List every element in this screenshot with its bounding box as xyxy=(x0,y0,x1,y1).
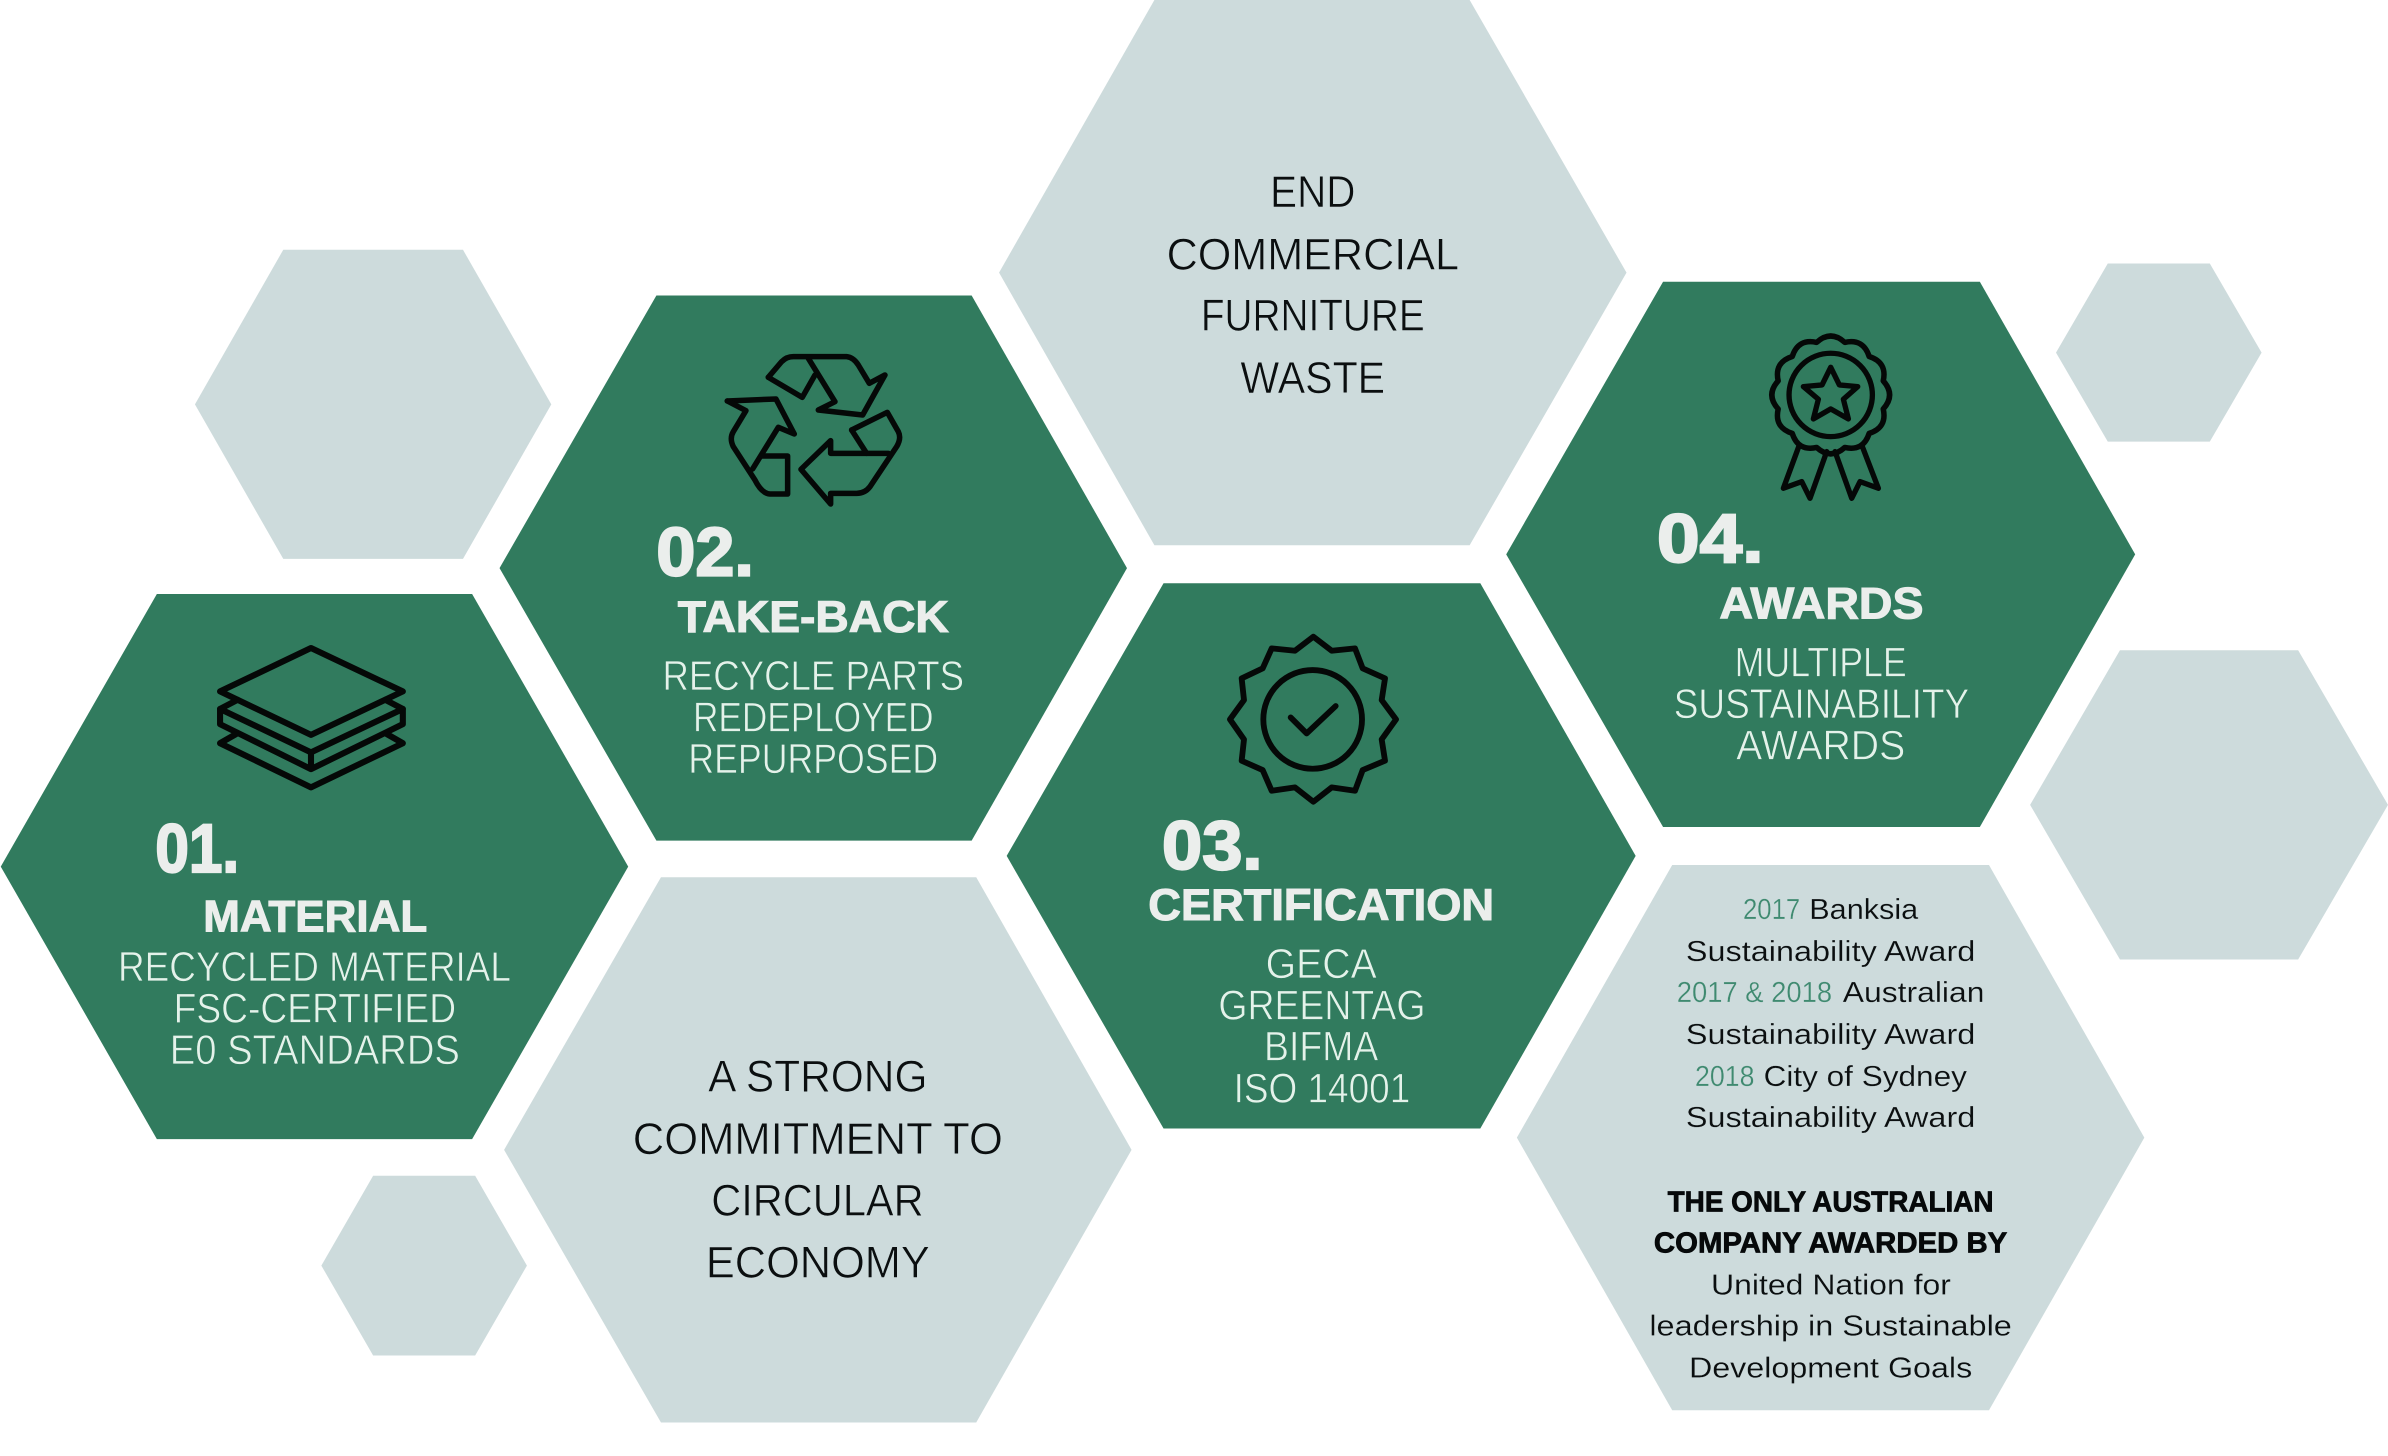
statement text: WASTE xyxy=(1240,354,1385,403)
icon: stacked layers xyxy=(220,648,403,787)
statement text: CIRCULAR xyxy=(711,1176,924,1225)
heading: certification: CERTIFICATION xyxy=(1148,881,1494,930)
decorative hexagon: upper right small xyxy=(2056,263,2262,442)
list of awards: Sustainability Award xyxy=(1686,1019,1975,1051)
list: material items: RECYCLED MATERIAL xyxy=(118,943,511,990)
number 01: 01. xyxy=(155,810,239,887)
statement text: ECONOMY xyxy=(706,1238,930,1287)
list of awards: Australian xyxy=(1843,977,1984,1009)
panel: 01 material xyxy=(1,594,628,1139)
heading: material: MATERIAL xyxy=(203,892,427,941)
United Nations description xyxy=(1649,1270,2012,1385)
decorative hexagon: upper left xyxy=(195,250,551,559)
number 02: 02. xyxy=(656,514,754,591)
United Nations description: leadership in Sustainable xyxy=(1649,1311,2012,1343)
list: certifications: BIFMA xyxy=(1264,1023,1378,1070)
list: take-back items: RECYCLE PARTS xyxy=(662,652,964,699)
list of awards: 2017 & 2018 xyxy=(1677,977,1832,1009)
hexagon background 02 xyxy=(500,295,1127,841)
statement text: A STRONG xyxy=(708,1053,927,1102)
hexagon background 03 xyxy=(1007,583,1636,1129)
bold statement: COMPANY AWARDED BY xyxy=(1654,1228,2007,1260)
list of awards: City of Sydney xyxy=(1764,1061,1967,1093)
panel: strong commitment xyxy=(504,877,1132,1422)
icon: certified badge xyxy=(1230,637,1396,802)
list: certifications: GREENTAG xyxy=(1218,981,1425,1028)
list of awards: Sustainability Award xyxy=(1686,936,1975,968)
heading: take-back: TAKE-BACK xyxy=(678,593,949,642)
list: certifications: ISO 14001 xyxy=(1234,1064,1410,1111)
list of awards xyxy=(1677,894,1984,1134)
list: take-back items: REPURPOSED xyxy=(688,735,938,782)
panel: 03 certification xyxy=(1007,583,1636,1129)
list: certifications xyxy=(1218,940,1425,1111)
icon: recycling arrows xyxy=(727,357,900,504)
statement text: END xyxy=(1270,168,1355,217)
panel: end commercial furniture waste xyxy=(999,0,1627,545)
statement text: COMMERCIAL xyxy=(1167,231,1459,280)
statement text xyxy=(1167,168,1459,403)
bold statement xyxy=(1654,1187,2007,1260)
list: awards summary: AWARDS xyxy=(1736,722,1905,769)
list: take-back items xyxy=(662,652,964,782)
hexagon background xyxy=(504,877,1132,1422)
list: awards summary: SUSTAINABILITY xyxy=(1674,680,1969,727)
hexagon background xyxy=(1517,865,2144,1410)
United Nations description: United Nation for xyxy=(1711,1270,1951,1302)
hexagon background 04 xyxy=(1506,282,2135,827)
statement text: FURNITURE xyxy=(1201,291,1425,340)
statement text: COMMITMENT TO xyxy=(633,1115,1003,1164)
list: take-back items: REDEPLOYED xyxy=(693,693,934,740)
statement text xyxy=(633,1053,1003,1287)
list: certifications: GECA xyxy=(1266,940,1377,987)
list of awards: 2018 xyxy=(1695,1061,1754,1093)
list: material items xyxy=(118,943,511,1073)
decorative hexagon: lower left small xyxy=(321,1176,527,1355)
panel: award details xyxy=(1517,865,2144,1410)
list of awards: 2017 xyxy=(1743,894,1800,926)
list: awards summary xyxy=(1674,639,1969,769)
number 03: 03. xyxy=(1162,807,1263,884)
United Nations description: Development Goals xyxy=(1689,1353,1972,1385)
list: awards summary: MULTIPLE xyxy=(1735,639,1907,686)
icon: award rosette xyxy=(1772,336,1890,498)
hexagon background 01 xyxy=(1,594,628,1139)
list of awards: Banksia xyxy=(1809,894,1919,926)
heading: awards: AWARDS xyxy=(1719,579,1923,628)
bold statement: THE ONLY AUSTRALIAN xyxy=(1668,1187,1994,1219)
list of awards: Sustainability Award xyxy=(1686,1102,1975,1134)
list: material items: FSC-CERTIFIED xyxy=(174,984,456,1031)
panel: 04 awards xyxy=(1506,282,2135,827)
panel: 02 take-back xyxy=(500,295,1127,841)
list: material items: E0 STANDARDS xyxy=(170,1026,460,1073)
number 04: 04. xyxy=(1657,500,1764,577)
decorative hexagon: right middle xyxy=(2030,650,2388,959)
hexagon background xyxy=(999,0,1627,545)
